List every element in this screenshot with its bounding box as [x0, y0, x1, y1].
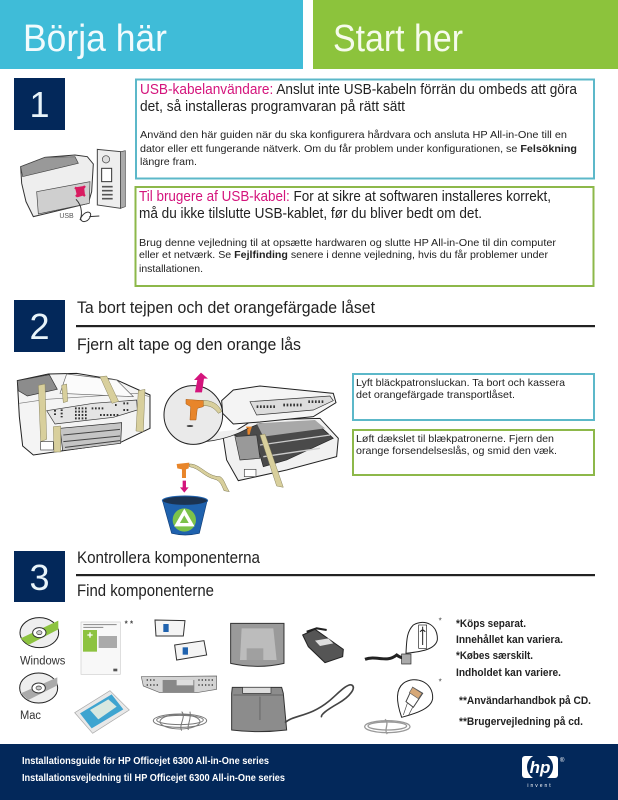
Danish USB note: Brug denne vejledning til at opsætte hardwaren og slutte HP All-in-One til din computer	[139, 237, 557, 249]
step 3 number: 3	[29, 557, 50, 598]
phone cord	[153, 712, 207, 731]
output tray	[232, 687, 287, 732]
removed lock with tape	[177, 463, 229, 492]
Danish USB note	[136, 187, 594, 286]
step 3 headings	[76, 548, 595, 600]
Danish USB note: eller et netværk. Se Fejlfinding senere i denne vejledning, hvis du får problemer under	[139, 249, 549, 261]
step 2 headings: Ta bort tejpen och det orangefärgade låset	[77, 298, 375, 317]
Windows CD	[20, 618, 59, 648]
Windows label: Windows	[20, 654, 65, 668]
ink cartridges	[155, 620, 207, 660]
notes: user guide on CD: **Användarhandbok på CD.	[459, 695, 591, 707]
Danish USB note: må du ikke tilslutte USB-kablet, før du bliver bedt om det.	[139, 205, 482, 222]
illustration: printer with USB warning	[21, 149, 125, 222]
power supply and cables	[285, 616, 442, 734]
illustration: open printer with orange lock	[162, 373, 338, 535]
recycle bin	[162, 496, 208, 535]
Swedish USB note: dator eller ett fungerande nätverk. Om du får problem under konfigurationen, se Felsökning	[140, 143, 577, 155]
Mac label: Mac	[20, 708, 41, 722]
USB cable with callout: *	[439, 616, 442, 625]
Danish instruction box	[353, 430, 594, 475]
notes: sold separately: *Köps separat.	[456, 618, 526, 630]
HP logo: hp	[530, 758, 550, 777]
notes: sold separately: *Købes særskilt.	[456, 650, 533, 662]
banner: Swedish title	[0, 0, 303, 69]
USB cable with callout	[365, 616, 442, 664]
Swedish USB note: USB-kabelanvändare: Anslut inte USB-kabeln förrän du ombeds att göra	[140, 81, 578, 98]
setup guide: * *	[125, 620, 134, 629]
USB label: USB	[59, 213, 74, 220]
notes: user guide on CD: **Brugervejledning på cd.	[459, 716, 583, 728]
Swedish USB note: det, så installeras programvaran på rätt sätt	[140, 98, 406, 115]
paper tray	[60, 423, 122, 451]
notes: user guide on CD	[459, 695, 591, 728]
Mac CD	[20, 673, 58, 703]
control panel	[47, 400, 137, 424]
arrow down	[180, 481, 189, 493]
power cord	[285, 685, 353, 723]
Danish instruction box: Løft dækslet til blækpatronerne. Fjern den	[356, 433, 554, 445]
printer rear	[21, 155, 93, 217]
step 2 number: 2	[29, 306, 50, 347]
control panel overlay	[141, 676, 217, 693]
Danish instruction box: orange forsendelseslås, og smid den væk.	[356, 445, 557, 457]
arrow up	[194, 373, 208, 392]
components illustrations	[20, 618, 287, 733]
Ethernet cable with callout	[365, 677, 442, 734]
step 3 number	[14, 551, 65, 602]
Swedish instruction box	[353, 374, 594, 420]
step 1 number: 1	[29, 84, 50, 125]
HP logo: invent	[527, 783, 553, 789]
step 3 headings: Kontrollera komponenterna	[77, 548, 260, 567]
Danish USB note: installationen.	[139, 263, 203, 275]
banner: Danish title: Start her	[333, 18, 463, 60]
HP logo	[522, 754, 565, 789]
illustration: printer with tape	[17, 373, 150, 455]
footer: Installationsguide för HP Officejet 6300 All-in-One series	[22, 755, 269, 767]
tape	[260, 434, 283, 487]
small lock	[246, 427, 252, 435]
footer: Installationsvejledning til HP Officejet 6300 All-in-One series	[22, 772, 285, 784]
Ethernet cable with callout: *	[439, 677, 442, 686]
power adapter	[303, 628, 343, 663]
HP logo: ®	[560, 757, 565, 764]
tape strips	[38, 376, 145, 452]
scanner lid	[222, 386, 336, 424]
paper tray	[231, 623, 284, 666]
magnifier	[164, 386, 248, 444]
Swedish USB note: längre fram.	[140, 156, 197, 168]
step 3 headings: Find komponenterne	[77, 581, 214, 600]
banner: Swedish title: Börja här	[23, 18, 167, 60]
wall plate	[97, 149, 125, 208]
Swedish instruction box: det orangefärgade transportlåset.	[356, 389, 515, 401]
Swedish USB note: Använd den här guiden när du ska konfigurera hårdvara och ansluta HP All-in-One till en	[140, 129, 567, 141]
notes: sold separately: Indholdet kan variere.	[456, 667, 561, 679]
step 1 number	[14, 78, 65, 130]
banner: Danish title	[313, 0, 618, 69]
printer body	[223, 418, 338, 481]
setup guide	[81, 620, 134, 674]
Danish USB note: Til brugere af USB-kabel: For at sikre at softwaren installeres korrekt,	[139, 188, 551, 205]
footer	[0, 744, 618, 800]
step 2 number	[14, 300, 65, 352]
photo paper pack	[75, 691, 129, 733]
Swedish instruction box: Lyft bläckpatronsluckan. Ta bort och kassera	[356, 377, 565, 389]
step 2 headings	[76, 298, 595, 354]
Swedish USB note	[136, 80, 594, 178]
step 2 headings: Fjern alt tape og den orange lås	[77, 335, 301, 354]
notes: sold separately	[456, 618, 563, 679]
USB cable	[76, 199, 99, 222]
notes: sold separately: Innehållet kan variera.	[456, 634, 563, 646]
